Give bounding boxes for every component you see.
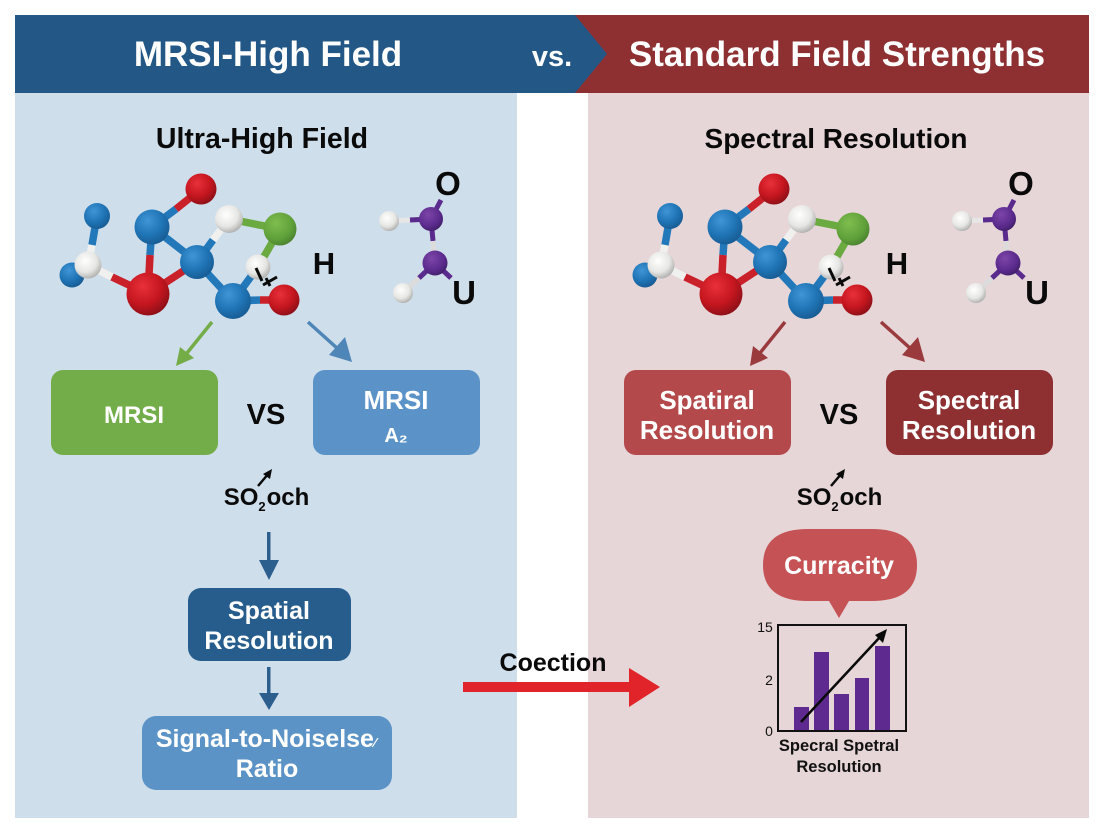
- molecule: right small: [886, 165, 1049, 311]
- chart caption: Resolution: [796, 758, 882, 776]
- bar chart: [757, 619, 906, 776]
- box: MRSI: MRSI: [104, 402, 164, 429]
- chart y labels: 2: [765, 672, 773, 688]
- molecule: right small: U: [1025, 274, 1049, 311]
- header title: standard field: Standard Field Strengths: [629, 35, 1045, 74]
- box: spatial resolution red: [624, 370, 791, 455]
- molecule: right large: [632, 174, 872, 319]
- arrow: right red: [881, 322, 925, 362]
- label: SO2 och left: 2: [258, 499, 266, 514]
- callout: curracity: [763, 529, 917, 618]
- box: spectral resolution dark red: Spectral: [918, 385, 1020, 415]
- box: spectral resolution dark red: Resolution: [902, 415, 1036, 445]
- chart axes: [778, 625, 906, 731]
- connector arrow: [463, 668, 660, 707]
- box: MRSI A2: A₂: [384, 425, 408, 447]
- box: MRSI A2: [313, 370, 480, 455]
- connector label: Coection: [500, 649, 606, 677]
- molecule: left small: U: [452, 274, 476, 311]
- label: VS right: VS: [820, 399, 858, 431]
- label: SO2 och left: [224, 469, 309, 514]
- box: signal-to-noise ratio: Ratio: [236, 755, 298, 783]
- box: MRSI: [51, 370, 218, 455]
- header vs label: vs.: [532, 41, 572, 73]
- box: spatial resolution red: Resolution: [640, 415, 774, 445]
- box: spatial resolution blue: Resolution: [204, 627, 334, 655]
- header banner: MRSI-high field: [15, 15, 607, 93]
- trend arrow: [801, 629, 887, 722]
- arrow: left red: [750, 322, 785, 366]
- arrow: blue to MRSI A2: [308, 322, 352, 362]
- chart caption: Specral Spetral: [779, 737, 899, 755]
- header title: MRSI-high field: MRSI-High Field: [134, 35, 402, 74]
- panel: standard field: [588, 93, 1089, 818]
- label: SO2 och right: SO: [797, 484, 831, 511]
- callout: curracity: Curracity: [784, 552, 894, 580]
- chart y labels: 0: [765, 723, 773, 739]
- arrow: green to MRSI: [176, 322, 212, 366]
- label: SO2 och right: 2: [831, 499, 839, 514]
- molecule: right small: O: [1008, 165, 1034, 202]
- box: MRSI A2: MRSI: [364, 385, 428, 415]
- molecule: left small: H: [313, 246, 335, 281]
- label: SO2 och left: SO: [224, 484, 258, 511]
- chart y labels: [757, 619, 773, 739]
- molecule: left small: [313, 165, 476, 311]
- chart y labels: 15: [757, 619, 773, 635]
- box: signal-to-noise ratio: [142, 716, 392, 790]
- heading: ultra-high field: Ultra-High Field: [156, 123, 368, 155]
- label: VS left: VS: [247, 399, 285, 431]
- header banner: standard field: [575, 15, 1089, 93]
- chart bars: [794, 646, 890, 731]
- box: spatial resolution blue: [188, 588, 351, 661]
- chart caption: [779, 737, 899, 776]
- label: SO2 och right: [797, 469, 882, 514]
- box: spatial resolution blue: Spatial: [228, 597, 310, 625]
- arrow: down to spatial resolution: [259, 532, 279, 580]
- heading: spectral resolution: Spectral Resolution: [705, 123, 967, 154]
- box: spectral resolution dark red: [886, 370, 1053, 455]
- molecule: left small: O: [435, 165, 461, 202]
- label: SO2 och left: och: [267, 484, 309, 511]
- label: SO2 och right: och: [840, 484, 882, 511]
- molecule: right small: H: [886, 246, 908, 281]
- box: signal-to-noise ratio: Signal-to-Noiselse⁄: [156, 725, 379, 753]
- molecule: left large: [60, 174, 300, 319]
- box: spatial resolution red: Spatiral: [659, 385, 755, 415]
- panel: ultra-high field: [15, 93, 517, 818]
- arrow: down to signal-to-noise: [259, 667, 279, 710]
